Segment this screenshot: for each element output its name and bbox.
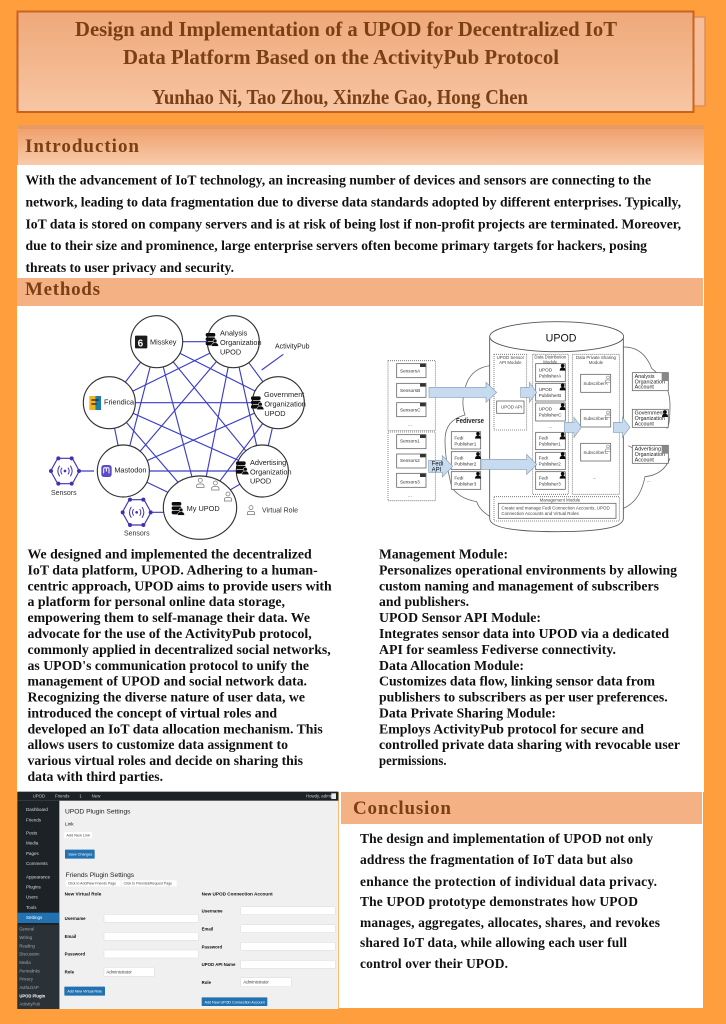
node: analysis organization xyxy=(206,329,262,356)
text: module descriptions: Employs ActivityPub protocol for secure and xyxy=(379,721,644,736)
conclusion heading: Conclusion xyxy=(353,798,451,819)
upod publishers: Publisher3 xyxy=(539,481,561,486)
module frames xyxy=(494,354,619,521)
upod cylinder: UPOD xyxy=(546,333,577,345)
admin bar: 1 xyxy=(79,794,82,799)
new virtual role form: Administrator xyxy=(106,969,132,974)
upod api box xyxy=(497,401,524,413)
upod publishers: Fedi xyxy=(539,475,548,480)
conclusion text: The design and implementation of UPOD not only xyxy=(360,831,653,846)
admin sidebar: Appearance xyxy=(26,874,51,879)
admin sidebar: Friends xyxy=(26,817,42,822)
upod plugin settings section: Add New Link xyxy=(66,833,90,837)
new upod connection account form: Email xyxy=(202,926,213,931)
text: module descriptions: Data Private Sharing Module: xyxy=(379,705,556,720)
sensor groups xyxy=(388,361,435,501)
panel: methods xyxy=(17,278,704,792)
activitypub label: ActivityPub xyxy=(275,343,310,350)
new virtual role form: New Virtual Role xyxy=(65,892,102,897)
activitypub connections xyxy=(80,342,283,512)
admin sidebar: Permalinks xyxy=(19,968,40,973)
architecture diagram: ... xyxy=(408,493,412,498)
text: methods overview: introduced the concept of virtual roles and xyxy=(28,705,277,720)
organization accounts: Government xyxy=(635,411,665,417)
text: module descriptions: permissions. xyxy=(379,753,446,768)
new upod connection account form: Password xyxy=(202,944,222,949)
upod plugin settings section: Link xyxy=(65,822,74,827)
conclusion text: address the fragmentation of IoT data but also xyxy=(360,852,633,867)
organization accounts: Account xyxy=(635,421,654,427)
node: my upod: My UPOD xyxy=(187,504,220,513)
admin sidebar: Privacy xyxy=(19,977,34,982)
architecture diagram: API Module xyxy=(499,360,522,365)
node: analysis organization: Organization xyxy=(220,338,262,347)
virtual role legend: Virtual Role xyxy=(262,507,298,514)
new virtual role form: Email xyxy=(65,934,76,939)
text: module descriptions: publishers to subscribers as per user preferences. xyxy=(379,690,668,704)
conclusion text: enhance the protection of individual data privacy. xyxy=(360,874,657,889)
fediverse and organization clouds xyxy=(445,347,670,518)
fediverse publishers: Publisher2 xyxy=(454,461,477,466)
new upod connection account form: Add New UPOD Connection Account xyxy=(205,1000,265,1004)
node: government organization: Organization xyxy=(264,400,306,409)
text: methods overview: advocate for the use of the ActivityPub protocol, xyxy=(28,626,312,641)
node: government organization: Government xyxy=(264,390,304,399)
text: methods overview: allows users to customize data assignment to xyxy=(28,737,288,752)
upod publishers: PublisherC xyxy=(539,413,562,418)
admin sidebar: Pages xyxy=(26,851,39,856)
admin sidebar: UPOD Plugin xyxy=(19,993,46,998)
fediverse publishers: Publisher1 xyxy=(454,441,477,446)
new upod connection account form: Administrator xyxy=(243,980,269,985)
upod publishers: Publisher2 xyxy=(539,461,561,466)
upod plugin settings section: UPOD Plugin Settings xyxy=(65,809,131,816)
text: module descriptions: custom naming and management of subscribers xyxy=(379,578,659,593)
conclusion text: The UPOD prototype demonstrates how UPOD xyxy=(360,894,638,909)
upod plugin settings section: Save Changes xyxy=(68,853,92,857)
new virtual role form: Role xyxy=(65,970,75,975)
panel: introduction xyxy=(17,125,704,278)
text: methods overview: We designed and implemented the decentralized xyxy=(28,547,312,562)
upod publishers: ... xyxy=(548,424,552,429)
node: advertising organization: Organization xyxy=(250,467,292,476)
text: module descriptions: Integrates sensor data into UPOD via a dedicated xyxy=(379,626,669,641)
text: methods overview: developed an IoT data allocation mechanism. This xyxy=(28,721,323,736)
text: module descriptions: and publishers. xyxy=(379,594,469,609)
conclusion text: control over their UPOD. xyxy=(360,956,508,971)
architecture diagram: Sensors1 xyxy=(400,439,420,444)
poster title: Data Platform Based on the ActivityPub Protocol xyxy=(123,45,559,69)
fediverse label: Fediverse xyxy=(456,418,484,425)
text: methods overview: data with third parties. xyxy=(28,769,163,784)
organization accounts: Account xyxy=(635,457,654,463)
architecture diagram: Sensors3 xyxy=(400,479,420,484)
text: methods overview xyxy=(28,547,332,784)
title banner xyxy=(17,12,705,112)
node: government organization: UPOD xyxy=(264,409,286,418)
conclusion text: manages, aggregates, allocates, shares, and revokes xyxy=(360,915,660,930)
text: module descriptions: UPOD Sensor API Module: xyxy=(379,610,541,625)
upod plugin settings section xyxy=(64,809,131,859)
node: friendica xyxy=(89,396,135,410)
new upod connection account form: Role xyxy=(202,980,212,985)
admin sidebar: Comments xyxy=(26,861,48,866)
text: module descriptions: Customizes data flow, linking sensor data from xyxy=(379,674,656,689)
organization accounts: Organization xyxy=(635,416,665,422)
text: module descriptions: Data Allocation Module: xyxy=(379,658,524,673)
virtual role legend xyxy=(247,506,298,515)
conclusion text: shared IoT data, while allowing each user full xyxy=(360,935,627,950)
introduction text: threats to user privacy and security. xyxy=(26,260,234,275)
architecture diagram: SensorsC xyxy=(400,407,421,412)
node: my upod xyxy=(172,478,232,515)
admin bar: Friends xyxy=(55,794,69,799)
introduction text: due to their size and prominence, large enterprise servers often become primary targets for hackers, posing xyxy=(26,238,647,253)
admin sidebar: Posts xyxy=(26,831,38,836)
fediverse publishers: Fedi xyxy=(454,455,463,460)
fediverse publishers: Publisher3 xyxy=(454,481,477,486)
admin bar: New xyxy=(92,794,101,799)
subscribers: SubscriberA xyxy=(583,381,608,386)
admin sidebar: Reading xyxy=(19,943,36,948)
upod publishers: UPOD xyxy=(539,367,553,372)
introduction text xyxy=(26,172,681,275)
upod cylinder xyxy=(490,322,624,532)
admin sidebar xyxy=(17,801,59,1009)
new upod connection account form: UPOD API Name xyxy=(202,962,236,967)
subscribers: SubscriberC xyxy=(583,450,609,455)
new virtual role form xyxy=(64,892,198,996)
fedi api label: Fedi xyxy=(432,461,443,467)
upod publishers: Publisher1 xyxy=(539,441,561,446)
architecture diagram: ... xyxy=(408,422,412,427)
admin sidebar: Writing xyxy=(19,935,33,940)
node: government organization xyxy=(251,390,306,418)
text: methods overview: as UPOD's communication protocol to unify the xyxy=(28,658,309,673)
architecture diagram: Sensors2 xyxy=(400,458,420,463)
architecture diagram: Module xyxy=(589,360,604,365)
text: methods overview: a platform for personal online data storage, xyxy=(28,594,285,609)
organization accounts xyxy=(632,373,668,483)
introduction text: IoT data is stored on company servers and is at risk of being lost if non-profit projects are terminated. Moreover, xyxy=(26,216,681,232)
introduction text: With the advancement of IoT technology, an increasing number of devices and sensors are connecting to the xyxy=(26,172,651,188)
admin sidebar: Settings xyxy=(26,915,43,920)
text: methods overview: centric approach, UPOD aims to provide users with xyxy=(28,578,332,593)
admin bar xyxy=(17,792,338,801)
panel: conclusion xyxy=(339,792,703,1008)
upod publishers: UPOD xyxy=(539,387,553,392)
friends plugin settings section xyxy=(66,872,177,886)
organization accounts: Advertising xyxy=(635,447,661,453)
management module box xyxy=(498,503,616,518)
architecture diagram: SensorsB xyxy=(400,388,420,393)
text: methods overview: management of UPOD and social network data. xyxy=(28,674,307,689)
organization accounts: Account xyxy=(635,385,654,391)
admin sidebar: Media xyxy=(26,841,39,846)
new upod connection account form: Username xyxy=(202,908,223,913)
node: advertising organization: UPOD xyxy=(250,477,271,486)
new upod connection account form xyxy=(202,892,335,1006)
methods heading: Methods xyxy=(25,279,100,300)
admin sidebar: Tools xyxy=(26,905,37,910)
admin sidebar: Dashboard xyxy=(26,807,48,812)
admin sidebar: Users xyxy=(26,895,38,900)
admin bar: UPOD xyxy=(33,794,45,799)
subscribers xyxy=(581,374,611,479)
upod publishers: UPOD xyxy=(539,407,553,412)
node: mastodon: Mastodon xyxy=(114,465,147,474)
sensors bottom xyxy=(121,498,153,538)
architecture diagram: Management Module xyxy=(540,497,581,502)
node circles xyxy=(83,316,304,539)
upod publishers: Fedi xyxy=(539,435,548,440)
admin sidebar: General xyxy=(19,927,34,932)
node: misskey xyxy=(135,336,177,349)
node: misskey: 6 xyxy=(138,338,144,349)
organization accounts: Organization xyxy=(635,452,665,458)
node: friendica: Friendica xyxy=(104,397,135,406)
upod publishers: PublisherA xyxy=(539,373,562,378)
architecture diagram: Module xyxy=(543,360,558,365)
friends plugin settings section: Friends Plugin Settings xyxy=(66,872,135,879)
poster title xyxy=(75,17,618,69)
upod api box: UPOD API xyxy=(501,405,522,410)
text: module descriptions: controlled private data sharing with revocable user xyxy=(379,737,680,752)
node: analysis organization: Analysis xyxy=(220,329,248,338)
organization accounts: ... xyxy=(647,478,651,483)
fediverse publishers: Fedi xyxy=(454,435,463,440)
text: module descriptions: API for seamless Fediverse connectivity. xyxy=(379,642,616,657)
friends plugin settings section: Click to Add/New Friends Page xyxy=(68,882,116,886)
text: module descriptions: Management Module: xyxy=(379,547,508,562)
node: analysis organization: UPOD xyxy=(220,347,241,356)
sensors left xyxy=(49,456,81,497)
upod publishers: Fedi xyxy=(539,455,548,460)
text: methods overview: IoT data platform, UPOD. Adhering to a human- xyxy=(28,562,318,578)
panel: plugin settings screenshot xyxy=(17,792,338,1009)
node: misskey: Misskey xyxy=(150,337,177,346)
architecture diagram: Data Distribution xyxy=(534,354,567,359)
fediverse publishers xyxy=(451,432,481,489)
node: advertising organization: Advertising xyxy=(250,458,286,467)
architecture diagram: UPOD Sensor xyxy=(497,355,525,360)
introduction heading: Introduction xyxy=(25,136,139,157)
poster title: Design and Implementation of a UPOD for Decentralized IoT xyxy=(75,17,618,41)
admin sidebar: Discussion xyxy=(19,952,40,957)
new upod connection account form: New UPOD Connection Account xyxy=(202,892,273,897)
text: methods overview: commonly applied in decentralized social networks, xyxy=(28,642,331,657)
friends plugin settings section: Click to Friends&Request Page xyxy=(124,882,172,886)
text: methods overview: various virtual roles and decide on sharing this xyxy=(28,753,303,768)
conclusion text xyxy=(360,831,660,971)
text: methods overview: Recognizing the diverse nature of user data, we xyxy=(28,690,305,704)
text: methods overview: empowering them to self-manage their data. We xyxy=(28,610,310,625)
subscribers: ... xyxy=(593,474,596,479)
admin sidebar: Media xyxy=(19,960,31,965)
data flow arrows xyxy=(429,382,630,477)
admin bar: Howdy, admin xyxy=(306,794,334,799)
admin sidebar: ActivityPub xyxy=(19,1002,41,1007)
upod publishers: PublisherB xyxy=(539,393,561,398)
architecture diagram: Data Private Sharing xyxy=(576,355,617,360)
network diagram xyxy=(49,316,310,539)
fedi api label xyxy=(432,461,443,474)
new virtual role form: Username xyxy=(65,916,86,921)
new virtual role form: Add New Virtual Role xyxy=(67,990,102,994)
upod publishers xyxy=(536,364,566,489)
admin sidebar: Plugins xyxy=(26,885,41,890)
fediverse publishers: Fedi xyxy=(454,475,463,480)
organization accounts: Organization xyxy=(635,379,665,385)
sensors left: Sensors xyxy=(51,490,77,497)
management module box: Connection Accounts and Virtual Roles xyxy=(501,511,580,516)
architecture diagram: SensorsA xyxy=(400,368,421,373)
sensors bottom: Sensors xyxy=(124,531,150,538)
text: module descriptions: Personalizes operational environments by allowing xyxy=(379,562,677,578)
admin sidebar: AuthLDAP xyxy=(19,985,39,990)
architecture diagram xyxy=(388,322,670,532)
node: advertising organization xyxy=(236,458,292,486)
new virtual role form: Password xyxy=(65,952,85,957)
introduction text: network, leading to data fragmentation due to diverse data standards adopted by different enterprises. Typically, xyxy=(26,194,681,210)
subscribers: SubscriberB xyxy=(583,416,608,421)
management module box: Create and manage Fedi Connection Accounts, UPOD xyxy=(501,506,611,511)
fedi api label: API xyxy=(432,468,442,474)
node: mastodon xyxy=(101,465,147,477)
text: module descriptions xyxy=(379,547,680,768)
authors: Yunhao Ni, Tao Zhou, Xinzhe Gao, Hong Chen xyxy=(152,85,528,109)
organization accounts: Analysis xyxy=(635,374,655,380)
